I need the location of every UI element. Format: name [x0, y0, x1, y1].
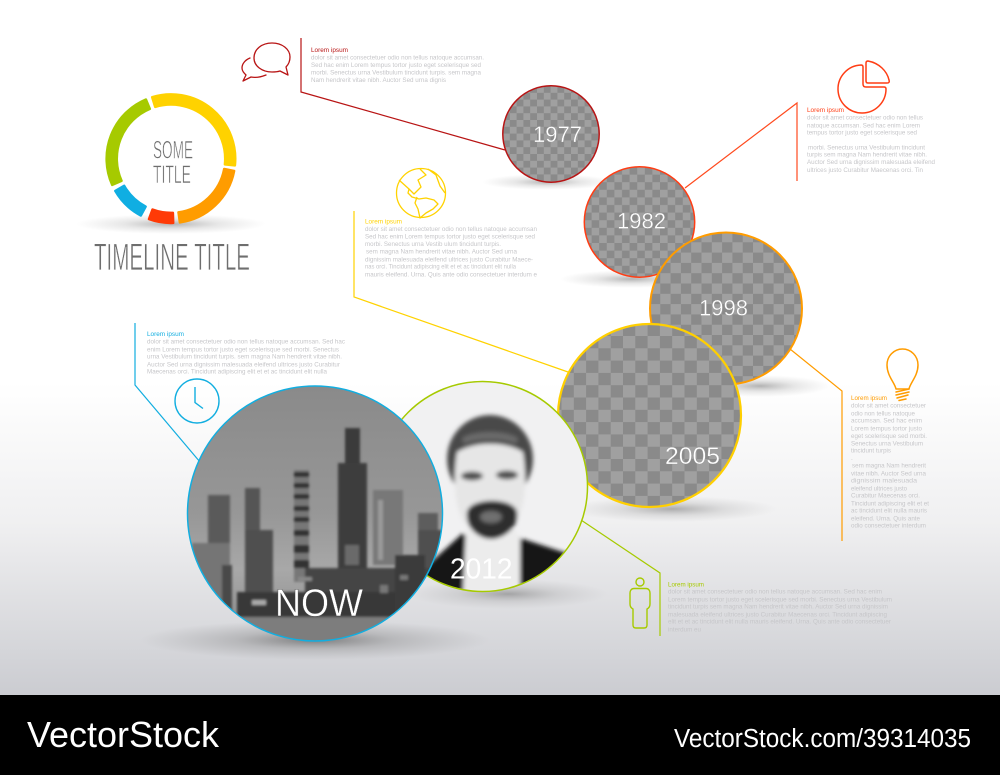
- text block: dolor sit amet consectetuer odio non tellus natoque accumsan. Sed hac: [147, 339, 346, 346]
- logo: donut ring and timeline title: [76, 94, 266, 279]
- text block: Sed hac enim Lorem tempus tortor justo eget scelerisque sed: [311, 62, 481, 69]
- icon: person: [630, 578, 650, 628]
- text block: Auctor Sed urna dignissim malesuada eleifend: [807, 159, 935, 166]
- text block: dolor sit amet consectetuer odio non tellus natoque accumsan.: [311, 54, 484, 62]
- text block: eleifend ultrices justo: [851, 485, 907, 492]
- icon: speech bubbles: [242, 43, 290, 81]
- text block: Tincidunt adipiscing elit et et: [851, 500, 929, 507]
- circle: 2005: 2005: [665, 443, 720, 470]
- circle: 1977: 1977: [533, 122, 582, 147]
- circle: 1998: 1998: [699, 296, 748, 320]
- text block: [311, 47, 484, 84]
- photo: blurred man: [428, 412, 566, 590]
- panel: 1998 callout: [790, 349, 929, 541]
- text block: [851, 395, 929, 530]
- text block: [668, 581, 892, 633]
- footer bar: [0, 695, 1000, 775]
- text block: eleifend. Urna. Quis ante: [851, 515, 920, 522]
- text block: Sed hac enim Lorem tempus tortor justo eget scelerisque sed: [365, 234, 535, 241]
- text block: odio consectetuer interdum: [851, 523, 926, 530]
- text block: morbi. Senectus urna Vestibulum tincidunt: [808, 144, 925, 151]
- circle: 2012 portrait: [401, 380, 588, 592]
- circle: now city photo: NOW: [275, 582, 363, 625]
- text block: eget scelerisque sed morbi.: [851, 433, 927, 440]
- text block: interdum eu: [668, 626, 701, 633]
- text block: Senectus urna Vestibulum: [851, 440, 923, 447]
- text block: dolor sit amet consectetuer odio non tellus: [807, 115, 924, 122]
- text block: [365, 218, 537, 278]
- footer bar: VectorStock.com/39314035: [674, 725, 971, 753]
- text block: Curabitur Maecenas orci.: [851, 493, 920, 500]
- text block: Lorem ipsum: [147, 331, 184, 338]
- panel: 2005 callout: [354, 168, 568, 372]
- footer bar: VectorStock: [27, 714, 220, 755]
- text block: turpis sem magna Nam hendrerit vitae nibh.: [807, 152, 927, 159]
- timeline title: TIMELINE TITLE: [94, 237, 250, 279]
- donut segment: blue: [115, 186, 146, 216]
- circle: 2012 portrait: 2012: [450, 554, 512, 586]
- circle: now city photo: [180, 386, 450, 647]
- icon: clock: [175, 379, 219, 423]
- text block: sem magna Nam hendrerit vitae nibh. Auctor Sed urna: [366, 249, 517, 256]
- text block: accumsan. Sed hac enim: [851, 418, 922, 425]
- text block: dolor sit amet consectetuer odio non tellus natoque accumsan: [365, 226, 537, 233]
- text block: Nam hendrerit vitae nibh. Auctor Sed urna dignis: [311, 77, 447, 84]
- donut segment: yellow: [152, 94, 235, 165]
- text block: dolor sit amet consectetuer: [851, 403, 927, 410]
- connector line: [581, 520, 660, 636]
- icon: globe: [396, 168, 446, 218]
- connector line: [685, 103, 797, 188]
- icon: light bulb: [887, 349, 918, 400]
- connector line: [790, 349, 842, 541]
- text block: Maecenas orci. Tincidunt adipiscing elit et et ac tincidunt elit nulla: [147, 369, 327, 376]
- circle: 1998: [650, 232, 802, 384]
- text block: morbi. Senectus urna Vestib ulum tincidunt turpis.: [365, 241, 501, 248]
- text block: morbi. Senectus urna Vestibulum tincidunt turpis. sem magna: [311, 70, 481, 76]
- circle: 1982: 1982: [617, 208, 666, 234]
- text block: sem magna Nam hendrerit: [852, 463, 926, 470]
- panel: now callout: [135, 323, 346, 462]
- text block: dignissim malesuada: [851, 478, 917, 485]
- text block: mauris eleifend. Urna. Quis ante odio consectetuer interdum e: [365, 271, 537, 278]
- circle shadows: [140, 174, 830, 660]
- text block: elit et et ac tincidunt elit nulla mauris eleifend. Urna. Quis ante odio consectetuer: [668, 619, 892, 626]
- text block: dignissim malesuada eleifend ultrices justo Curabitur Maece-: [365, 256, 533, 263]
- panel: 1977 callout: [242, 38, 505, 150]
- text block: Lorem ipsum: [668, 581, 704, 588]
- some title: TITLE: [153, 161, 191, 189]
- some title: SOME: [153, 136, 193, 164]
- text block: ultrices justo Curabitur Maecenas orci. Tin: [807, 167, 923, 174]
- panel: 1982 callout: [685, 61, 935, 188]
- circle: 2005: [558, 324, 741, 507]
- text block: Lorem tempus tortor justo: [851, 425, 922, 432]
- text block: Lorem ipsum: [807, 107, 844, 114]
- text block: vitae nibh. Auctor Sed urna: [851, 470, 926, 477]
- photo: blurred skyline: [192, 426, 441, 640]
- text block: Lorem ipsum: [365, 218, 402, 226]
- text block: malesuada eleifend ultrices justo Curabitur Maecenas orci. Tincidunt adipiscing: [668, 611, 887, 618]
- text block: .: [851, 455, 853, 462]
- text block: urna Vestibulum tincidunt turpis. sem magna Nam hendrerit vitae nibh.: [147, 354, 342, 361]
- text block: tincidunt turpis: [851, 448, 892, 455]
- text block: odio non tellus natoque: [851, 410, 915, 417]
- icon: pie chart: [838, 61, 889, 113]
- panel: 2012 callout: [581, 520, 892, 636]
- text block: nas orci. Tincidunt adipiscing elit et et ac tincidunt elit nulla: [365, 264, 516, 271]
- connector line: [135, 323, 200, 462]
- text block: dolor sit amet consectetuer odio non tellus natoque accumsan. Sed hac enim: [668, 589, 882, 596]
- text block: enim Lorem tempus tortor justo eget scelerisque sed morbi. Senectus: [147, 346, 340, 353]
- connector line: [354, 211, 568, 372]
- text block: natoque accumsan. Sed hac enim Lorem: [807, 122, 920, 129]
- text block: tincidunt turpis sem magna Nam hendrerit vitae nibh. Auctor Sed urna dignissim: [668, 604, 888, 611]
- text block: [807, 107, 935, 174]
- donut segment: orange: [178, 169, 234, 222]
- text block: ac tincidunt elit nulla mauris: [851, 508, 928, 515]
- text block: [147, 331, 346, 376]
- circle: 1982: [584, 167, 695, 277]
- text block: Lorem ipsum: [311, 47, 348, 54]
- circle: 1977: [503, 86, 599, 182]
- text block: tempus tortor justo eget scelerisque sed: [807, 130, 917, 137]
- text block: Auctor Sed urna dignissim malesuada eleifend ultrices justo Curabitur: [147, 361, 341, 368]
- donut segment: green: [107, 100, 150, 185]
- some title: [153, 136, 193, 189]
- text block: Lorem tempus tortor justo eget scelerisque sed morbi. Senectus urna Vestibulum: [668, 596, 892, 603]
- donut segment: red: [149, 210, 173, 223]
- text block: Lorem ipsum: [851, 395, 887, 402]
- connector line: [301, 38, 505, 150]
